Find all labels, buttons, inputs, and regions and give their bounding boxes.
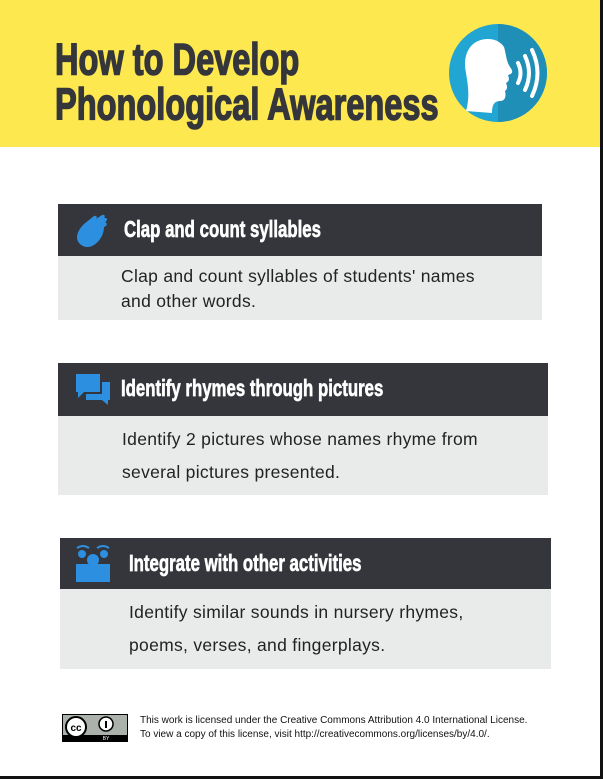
body text xyxy=(58,256,542,320)
body text: poems, verses, and fingerplays. xyxy=(129,635,385,655)
panel: clap xyxy=(58,204,542,320)
icon: chat bubbles xyxy=(76,374,110,405)
body text: Clap and count syllables of students' names xyxy=(121,266,475,286)
body text: and other words. xyxy=(121,291,256,311)
header: rhymes xyxy=(58,363,548,416)
header band xyxy=(0,0,603,147)
header: integrate xyxy=(60,538,551,589)
license: This work is licensed under the Creative Commons Attribution 4.0 International License. xyxy=(140,715,527,726)
title: Phonological Awareness xyxy=(55,80,439,130)
title: How to Develop xyxy=(55,35,299,85)
header: rhymes: Identify rhymes through pictures xyxy=(121,376,383,401)
icon: cc by badge xyxy=(62,714,128,742)
body text: Identify similar sounds in nursery rhymes, xyxy=(129,602,464,622)
header: integrate: Integrate with other activities xyxy=(129,551,361,576)
icon: hands xyxy=(77,214,108,247)
header: clap: Clap and count syllables xyxy=(124,217,321,242)
license xyxy=(62,714,527,742)
body text xyxy=(60,589,551,669)
page border xyxy=(600,0,603,779)
icon: cc by badge: BY xyxy=(103,736,110,742)
panel: integrate xyxy=(60,538,551,669)
icon: cc by badge: cc xyxy=(70,723,82,734)
body text: Identify 2 pictures whose names rhyme from xyxy=(122,429,478,449)
title xyxy=(55,35,439,130)
body text: several pictures presented. xyxy=(122,462,340,482)
header: clap xyxy=(58,204,542,256)
icon: speaking head xyxy=(449,24,547,122)
license: To view a copy of this license, visit http://creativecommons.org/licenses/by/4.0/. xyxy=(140,729,490,740)
icon: singers xyxy=(76,545,110,582)
body text xyxy=(58,416,548,495)
panel: rhymes xyxy=(58,363,548,495)
